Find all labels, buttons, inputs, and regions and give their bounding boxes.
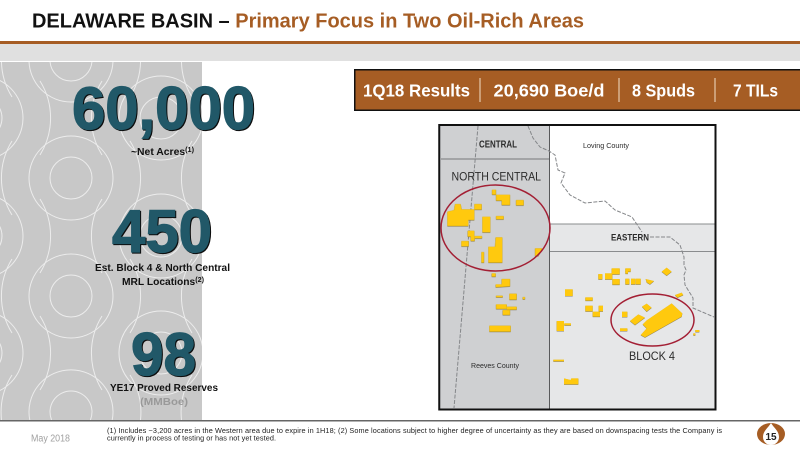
highlight ellipse: north central [441, 185, 550, 271]
map labels: Loving County [583, 143, 629, 150]
footnotes [107, 426, 722, 442]
acreage blocks: eastern and block 4 [553, 268, 699, 384]
page number logo [757, 423, 785, 445]
stat: locations: MRL Locations [122, 277, 193, 288]
results banner: 20,690 Boe/d [494, 80, 604, 100]
results banner: 8 Spuds [632, 80, 695, 100]
stat: locations: (2) [195, 277, 204, 284]
map labels: EASTERN [611, 232, 649, 244]
panel: key stats background [0, 62, 202, 420]
stat: proved reserves [110, 321, 218, 408]
stat: locations: Est. Block 4 & North Central [95, 263, 230, 274]
map labels [452, 140, 675, 370]
county boundaries [454, 126, 714, 408]
footnotes: (1) Includes ~3,200 acres in the Western area due to expire in 1H18; (2) Some locations subject to higher degree of uncertainty as they are based on downspacing tests the Company is [107, 426, 722, 435]
stat: proved reserves: YE17 Proved Reserves [110, 383, 218, 394]
stat: proved reserves: 98 [131, 321, 196, 388]
stat: proved reserves: (MMBoe) [140, 397, 188, 408]
map: Delaware Basin acreage [439, 125, 716, 410]
map labels: CENTRAL [479, 140, 517, 150]
results banner: 1Q18 Results [363, 80, 470, 100]
acreage blocks: north central [447, 190, 542, 332]
map labels: BLOCK 4 [629, 349, 675, 363]
map labels: NORTH CENTRAL [452, 170, 541, 184]
stat: net acres: (1) [185, 147, 194, 154]
map labels: Reeves County [471, 363, 520, 370]
highlight ellipse: block 4 [611, 294, 694, 346]
map frame [439, 125, 716, 410]
results banner [354, 69, 800, 111]
stat: net acres: 60,000 [72, 75, 255, 142]
footnotes: currently in process of testing or has not yet tested. [107, 434, 276, 442]
stat: net acres: ~Net Acres [131, 147, 183, 158]
stat: locations: 450 [112, 198, 212, 265]
results banner: 7 TILs [733, 80, 778, 100]
page number logo: 15 [765, 432, 777, 443]
title: DELAWARE BASIN – Primary Focus in Two Oil-Rich Areas [32, 10, 584, 32]
footer date: May 2018 [31, 434, 70, 444]
stat: locations [95, 198, 230, 288]
